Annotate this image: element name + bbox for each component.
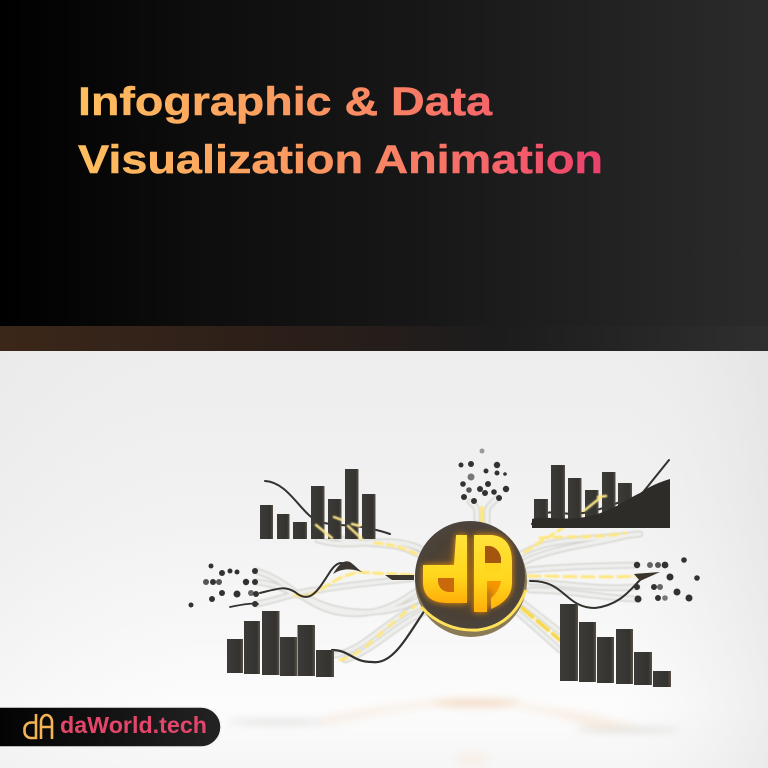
dark brown transition strip [0,326,768,351]
scattered data points: right [634,557,700,602]
brand name: daWorld.tech [60,712,207,738]
glowing yellow filaments [295,497,638,660]
title: Infographic & Data [78,80,493,124]
title [78,80,603,182]
icon: brand logo [24,714,52,739]
glowing wire tips over charts [316,496,606,539]
dark wires [230,460,669,662]
bar chart: bottom right [560,604,671,687]
floor reflection glow [228,699,680,768]
scattered data points: left [188,564,259,608]
icon: central dA disc [415,521,527,637]
bar chart: top left [260,469,376,539]
pill: brand badge [0,707,221,747]
panel: light studio backdrop [0,351,768,768]
bar and area chart: top right [532,465,670,528]
scattered data points: top [458,448,509,504]
title: Visualization Animation [78,138,603,182]
bar chart: bottom left [227,611,334,677]
glass tubes [256,498,640,660]
dark arrowhead marker [634,572,660,581]
panel: dark header background [0,0,768,326]
illustration: connected data visualization [188,448,700,687]
dark swoosh ribbon [333,561,414,580]
